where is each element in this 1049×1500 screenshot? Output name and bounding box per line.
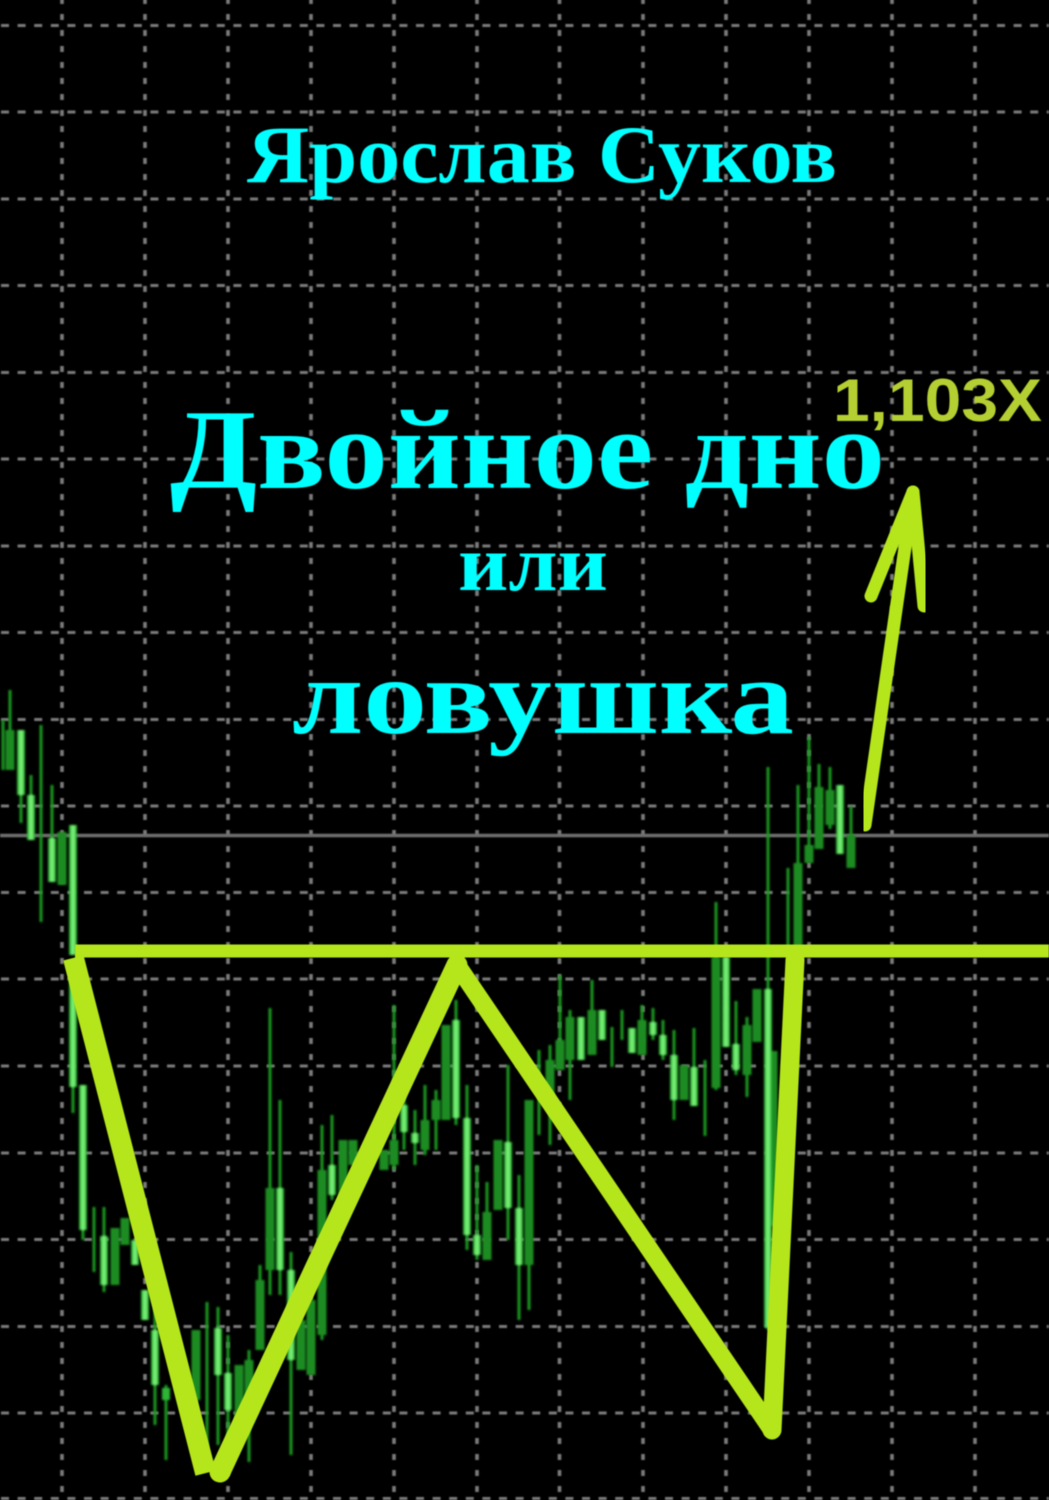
title connector: или (458, 521, 608, 608)
arrow: upward breakout (865, 492, 924, 825)
double bottom pattern: lime W-line and neckline (75, 951, 1049, 1472)
title line 1: Двойное дно (170, 388, 885, 513)
label: price target: 1,103X (833, 367, 1042, 434)
author name: Ярослав Суков (247, 109, 837, 200)
title line 2: ловушка (292, 638, 794, 757)
candlestick chart (3, 690, 851, 1462)
